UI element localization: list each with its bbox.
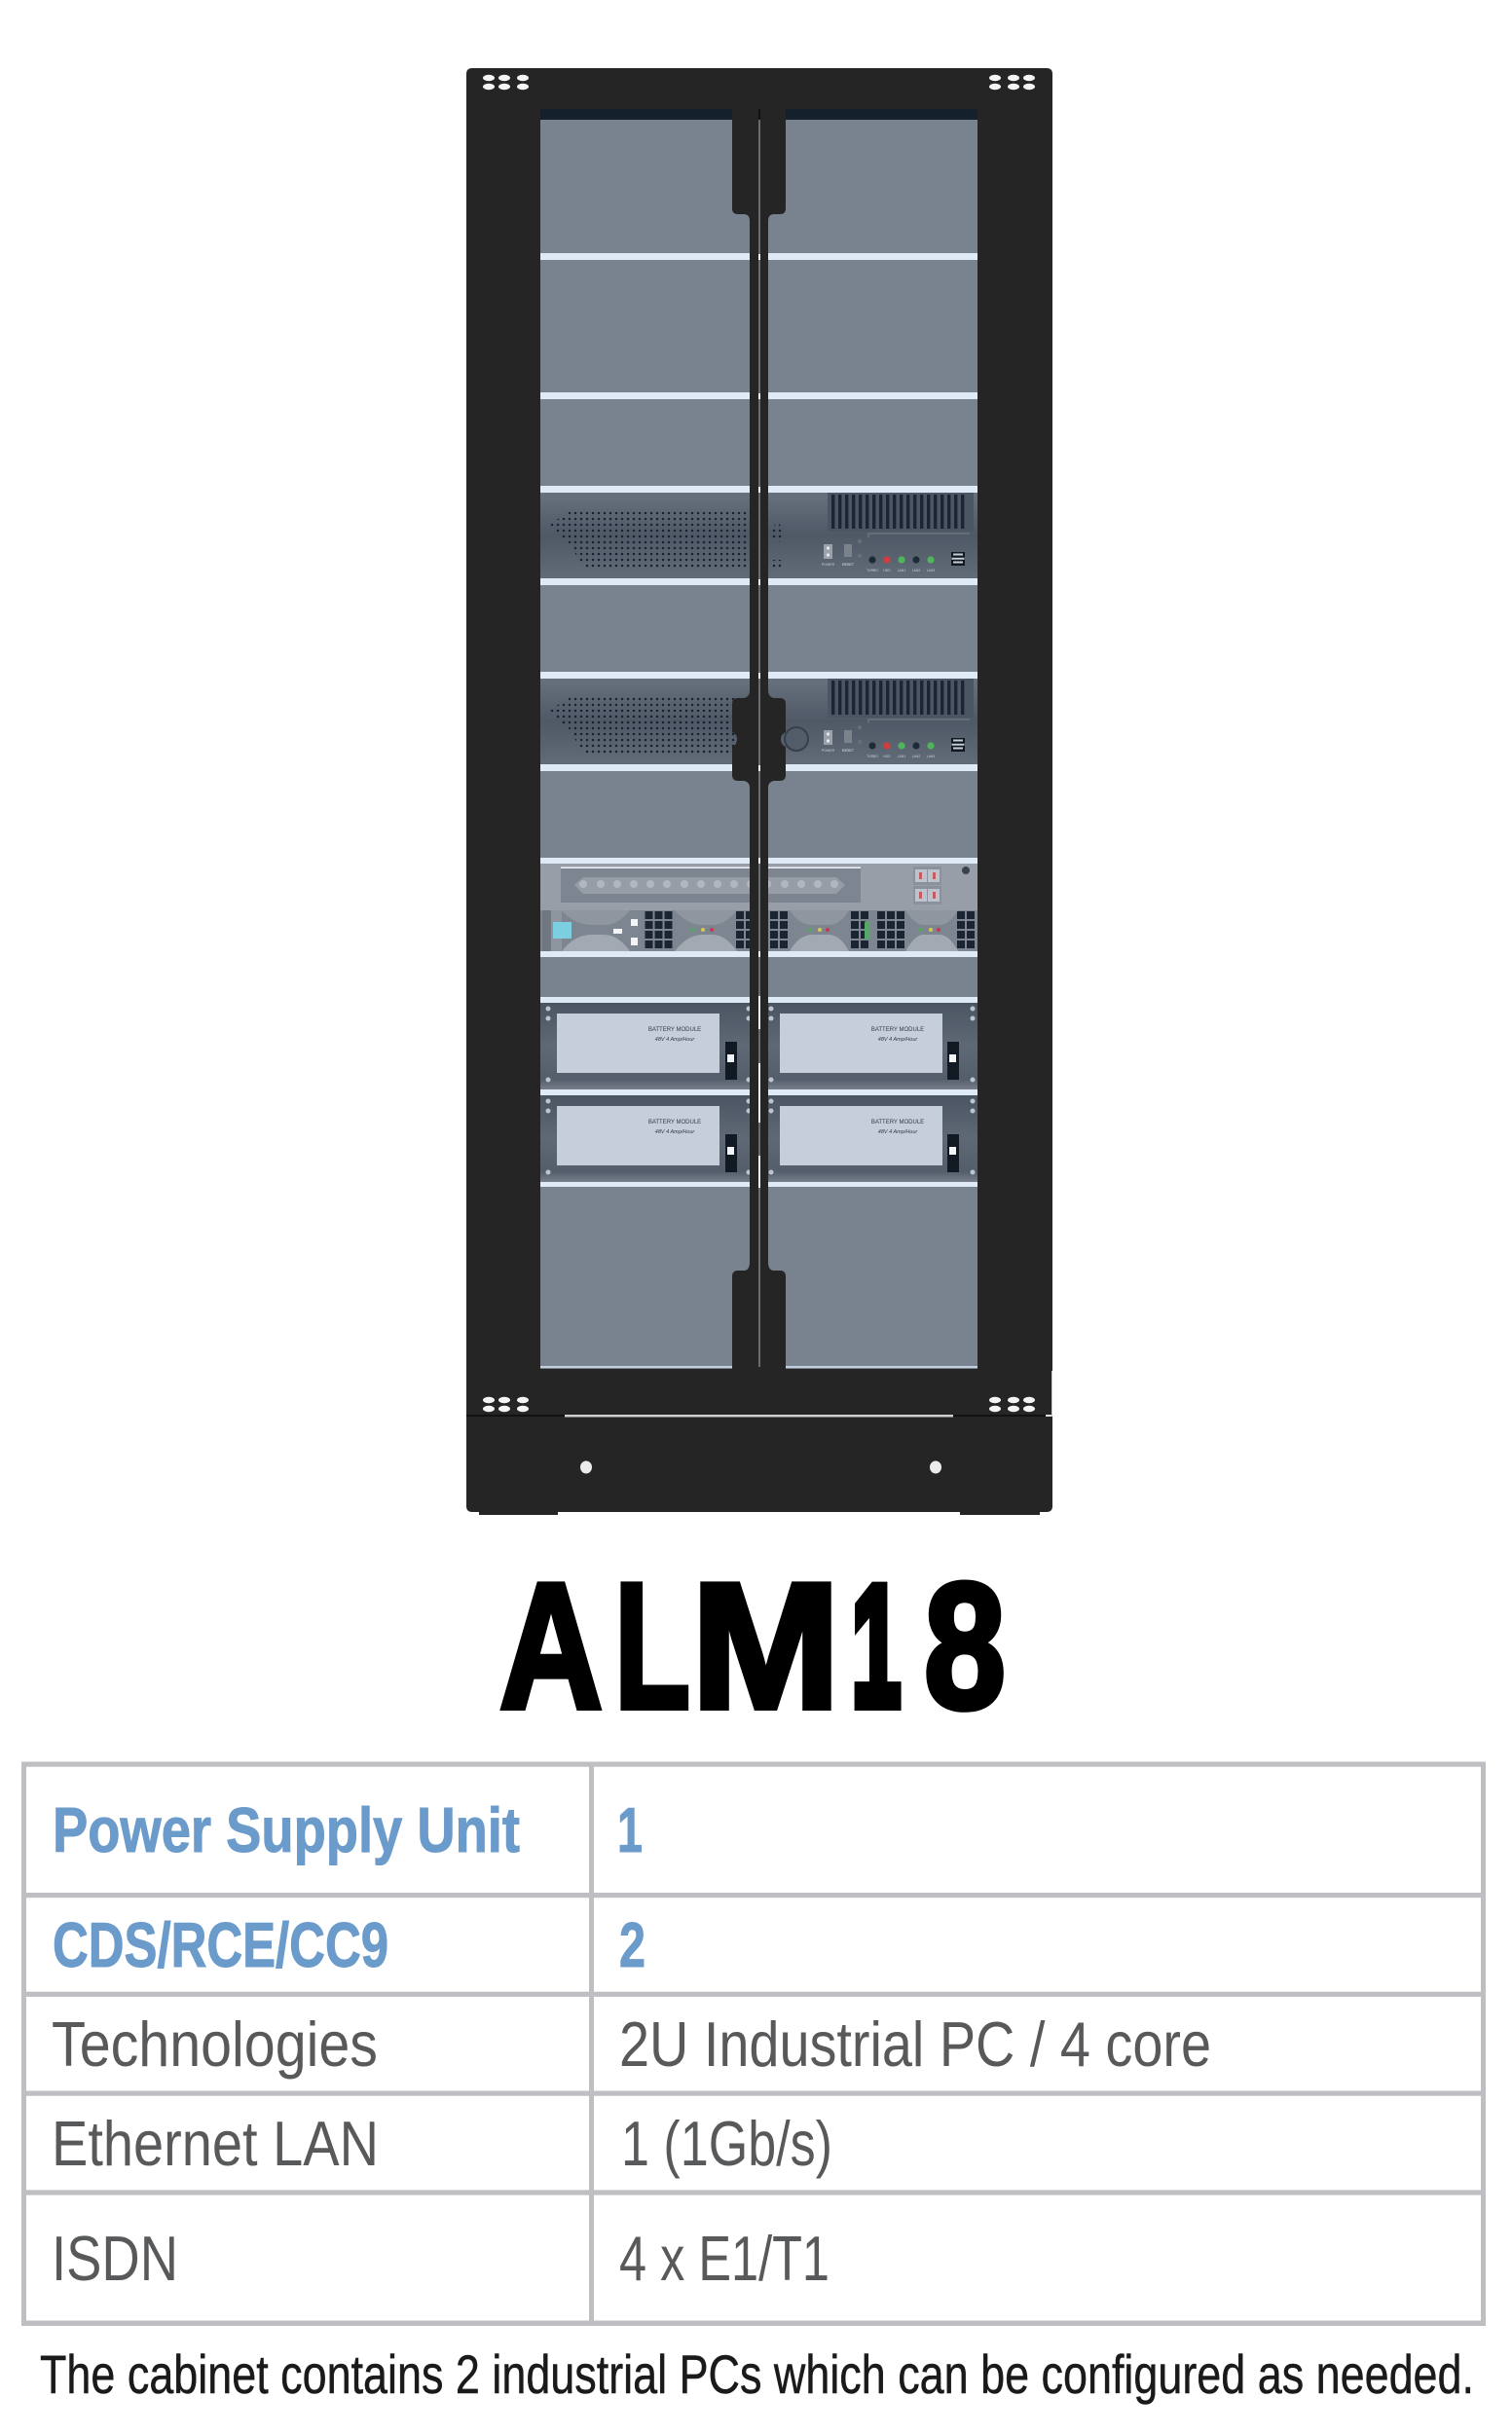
industrial PC 2: LAN1 <box>898 755 905 758</box>
industrial PC 2: TURBO <box>867 755 878 758</box>
row: ethernet LAN: 1 (1Gb/s) <box>621 2108 832 2179</box>
title: 8 <box>924 1545 1006 1746</box>
cabinet illustration <box>466 68 1052 1515</box>
rack shelves <box>540 253 977 1368</box>
power and reset buttons <box>824 730 832 745</box>
industrial PC 2: POWER <box>822 749 835 753</box>
vent <box>828 493 974 532</box>
bottom right mounting holes <box>989 1397 1035 1412</box>
USB ports <box>951 552 965 557</box>
row: power supply unit: Power Supply Unit <box>53 1794 520 1865</box>
rectifier modules <box>540 910 977 951</box>
cabinet window <box>540 109 977 1369</box>
row: CDS/RCE/CC9: CDS/RCE/CC9 <box>53 1909 388 1980</box>
breakers <box>913 867 941 885</box>
USB ports <box>951 738 965 744</box>
title: A <box>499 1545 603 1746</box>
row: ISDN: ISDN <box>52 2223 178 2294</box>
industrial PC 1: POWER <box>822 563 835 567</box>
battery module top left <box>540 1003 752 1089</box>
bottom left mounting holes <box>483 1397 529 1412</box>
plinth bolts <box>580 1460 941 1474</box>
industrial PC 1: HDD <box>883 569 891 572</box>
specification table <box>21 1762 1486 2326</box>
battery module bottom left: BATTERY MODULE <box>648 1120 701 1125</box>
plinth seam <box>466 1371 1052 1418</box>
top left mounting holes <box>483 75 529 90</box>
top right mounting holes <box>989 75 1035 90</box>
row: technologies: Technologies <box>52 2009 378 2080</box>
row: CDS/RCE/CC9: 2 <box>619 1909 645 1980</box>
industrial PC 2 <box>540 679 977 764</box>
battery module top right: 48V 4 Amp/Hour <box>878 1037 918 1043</box>
row: technologies <box>52 2009 1211 2080</box>
industrial PC 1: RESET <box>842 563 855 567</box>
door lock knob <box>785 727 808 751</box>
table grid <box>21 1762 1486 2326</box>
row: ISDN <box>52 2223 830 2294</box>
title: L <box>614 1545 690 1746</box>
window top shadow <box>540 109 977 120</box>
speaker grille <box>549 697 751 755</box>
battery module bottom right: BATTERY MODULE <box>871 1120 924 1125</box>
cyan display <box>553 922 572 939</box>
battery module bottom right: 48V 4 Amp/Hour <box>878 1129 918 1135</box>
speaker grille <box>549 511 751 569</box>
battery module top right <box>768 1003 977 1089</box>
industrial PC 2: LAN2 <box>912 755 920 758</box>
battery module bottom right <box>768 1095 977 1182</box>
status LEDs <box>868 556 876 564</box>
fan grilles <box>648 911 971 949</box>
outlet strip <box>561 868 861 903</box>
title: 1 <box>852 1552 901 1742</box>
industrial PC 2: RESET <box>842 749 855 753</box>
battery module top right: BATTERY MODULE <box>871 1027 924 1033</box>
battery module top left: BATTERY MODULE <box>648 1027 701 1033</box>
vent <box>828 679 974 718</box>
status LEDs <box>868 742 876 750</box>
title: M <box>691 1545 840 1746</box>
module LEDs <box>691 928 940 932</box>
industrial PC 2: LAN3 <box>927 755 935 758</box>
industrial PC 1: TURBO <box>867 569 878 572</box>
battery module bottom left: 48V 4 Amp/Hour <box>655 1129 695 1135</box>
door centre post with lock <box>732 105 786 1375</box>
industrial PC 1 <box>540 493 977 578</box>
row: technologies: 2U Industrial PC / 4 core <box>619 2009 1211 2080</box>
door seam line <box>758 109 760 1367</box>
industrial PC 2: HDD <box>883 755 891 758</box>
battery module top left: 48V 4 Amp/Hour <box>655 1037 695 1043</box>
industrial PC 1: LAN2 <box>912 569 920 572</box>
row: power supply unit: 1 <box>617 1794 643 1865</box>
industrial PC 1: LAN1 <box>898 569 905 572</box>
power and reset buttons <box>824 544 832 559</box>
cabinet frame <box>466 68 1052 1515</box>
row: ISDN: 4 x E1/T1 <box>619 2223 830 2294</box>
industrial PC 1: LAN3 <box>927 569 935 572</box>
module indicators <box>631 919 638 926</box>
power supply unit <box>540 864 977 951</box>
row: ethernet LAN <box>52 2108 832 2179</box>
battery module bottom left <box>540 1095 752 1182</box>
row: ethernet LAN: Ethernet LAN <box>52 2108 379 2179</box>
